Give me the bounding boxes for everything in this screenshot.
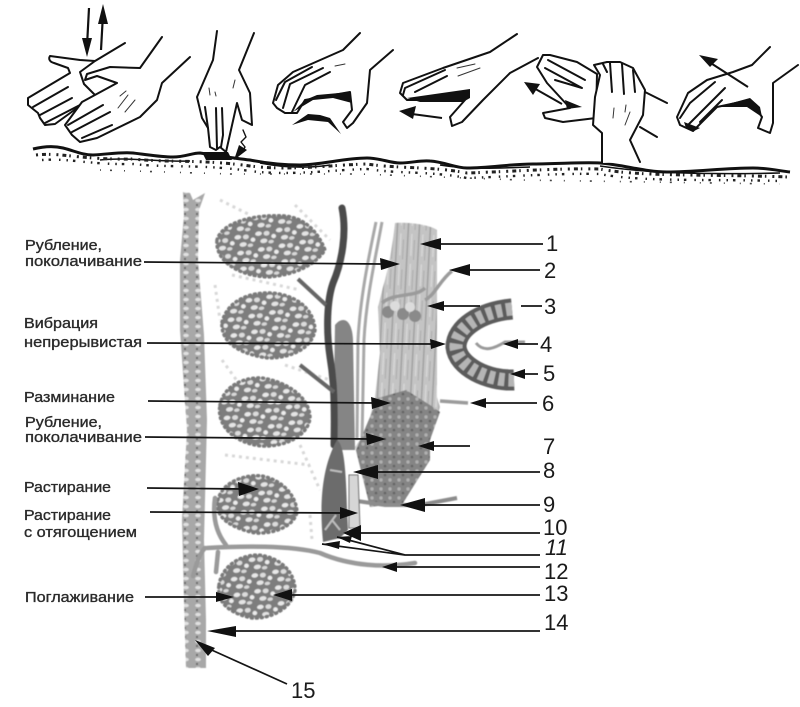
text labels [24,237,142,606]
lower duct 9 [350,498,457,505]
numbers: 5 [543,361,555,386]
hand 6: stroking [677,47,798,133]
numbers: 13 [544,581,568,606]
illustration: massage hand techniques [28,4,798,184]
connective tissue [215,200,330,540]
duct 4 [476,342,525,349]
numbers: 1 [546,231,558,256]
numbers: 14 [544,610,568,635]
ground: skin surface [33,147,790,184]
hand 3: kneading [273,33,393,134]
muscle column [355,223,440,507]
numbers [291,231,568,703]
numbers: 7 [543,434,555,459]
label: kneading: Разминание [24,389,115,406]
dark oval 8 [321,440,348,542]
text labels: поколачивание [25,253,142,270]
anatomical diagram: breast cross-section [180,192,525,668]
hand 2: finger pressing [197,31,254,160]
label: chopping, tapping 1: Рубление, [25,237,102,254]
hand 1: chopping, back hand [28,37,190,142]
hand 5: pressing palm [524,55,667,163]
lobule 2 [222,293,315,358]
skin strip [180,192,207,668]
numbers: 10 [543,515,567,540]
lobule 1 [217,216,325,277]
hand 4: rubbing [399,34,538,126]
numbers: 15 [291,678,315,703]
C-shaped gland 5 [456,309,514,380]
numbers: 11 [545,535,568,560]
label: continuous vibration: Вибрация [24,315,98,332]
numbered arrows [195,238,543,684]
numbers: 9 [543,492,555,517]
duct strip 10 [349,475,360,528]
text labels: поколачивание [25,429,142,446]
text labels: с отягощением [24,524,137,541]
text labels: непрерывистая [24,334,142,351]
numbers: 8 [543,458,555,483]
nerve branches [298,279,334,392]
left arrows [144,258,446,602]
numbers: 12 [544,559,568,584]
side branches [382,271,468,403]
label: stroking: Поглаживание [25,589,134,606]
numbers: 4 [540,332,552,357]
duct tree [193,498,415,576]
label: chopping, tapping 2: Рубление, [25,414,102,431]
darker lower muscle [356,390,440,507]
numbers: 2 [544,258,556,283]
dark nerve trunk [328,208,344,445]
lobule 4 [217,476,297,533]
arrow: up and down [82,4,108,57]
label: rubbing: Растирание [24,479,111,496]
lobule 3 [220,378,310,446]
gland circles [382,301,421,322]
numbers: 6 [542,391,554,416]
muscle sheath [333,320,355,450]
label: weighted rubbing: Растирание [24,507,111,524]
numbers: 3 [544,294,556,319]
light strip [357,222,382,440]
lobule 5 [219,555,295,618]
